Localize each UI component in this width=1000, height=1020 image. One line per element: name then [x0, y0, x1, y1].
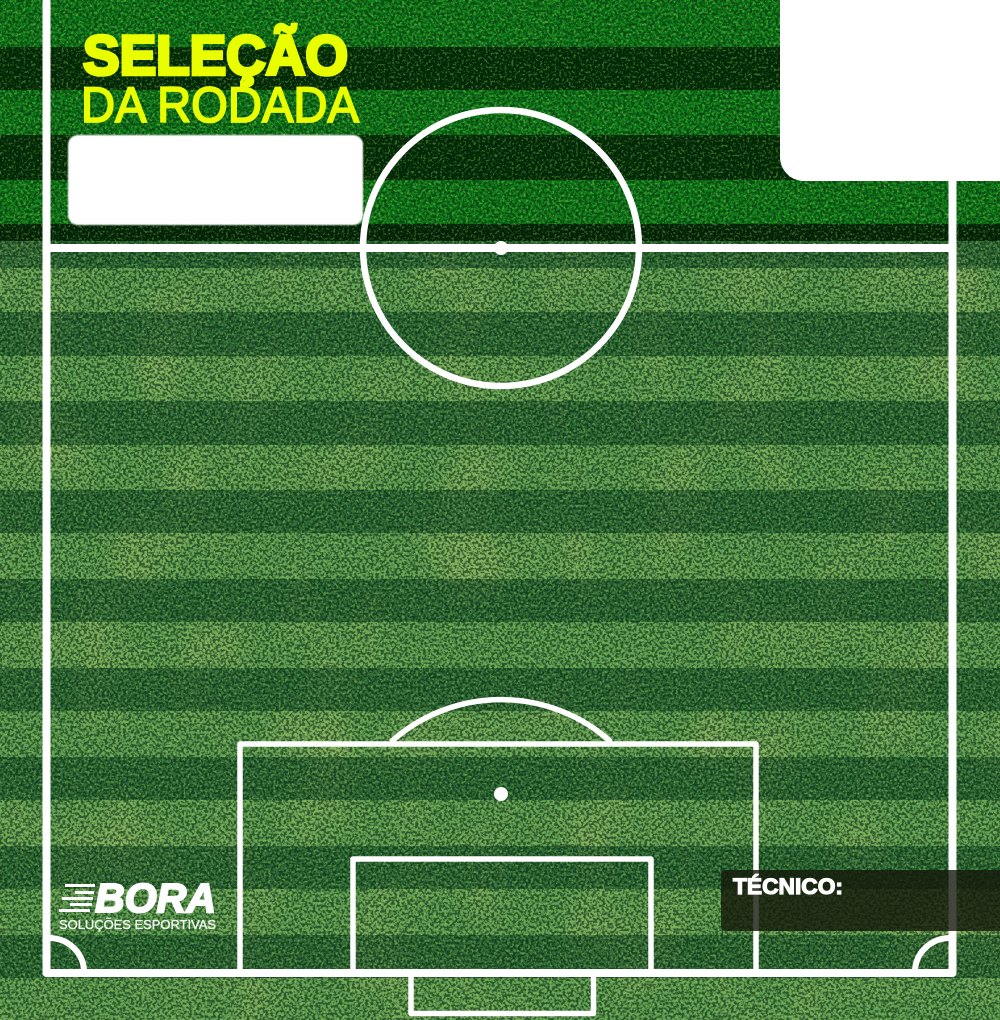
title line two: DA RODADA	[81, 77, 360, 133]
center circle	[363, 110, 639, 386]
title line one: SELEÇÃO	[83, 24, 348, 86]
penalty spot	[494, 787, 508, 801]
penalty arc	[391, 700, 611, 742]
goal	[411, 975, 594, 1014]
icon: speed lines	[59, 884, 95, 912]
panel: round info box	[68, 135, 363, 225]
coach label: TÉCNICO:	[733, 874, 843, 899]
corner arc right	[915, 938, 949, 971]
logo tagline: SOLUÇÕES ESPORTIVAS	[59, 917, 216, 932]
logo wordmark: BORA	[95, 875, 216, 921]
goal area	[353, 859, 651, 971]
corner arc left	[50, 938, 84, 971]
halfway line	[46, 244, 953, 252]
panel: coach	[721, 870, 1000, 931]
title	[81, 24, 360, 133]
logo: Bora	[59, 875, 216, 932]
darker saturated upper band	[0, 0, 1000, 241]
penalty box	[240, 744, 756, 971]
center spot	[494, 241, 508, 255]
panel: top right box	[780, 0, 1000, 181]
